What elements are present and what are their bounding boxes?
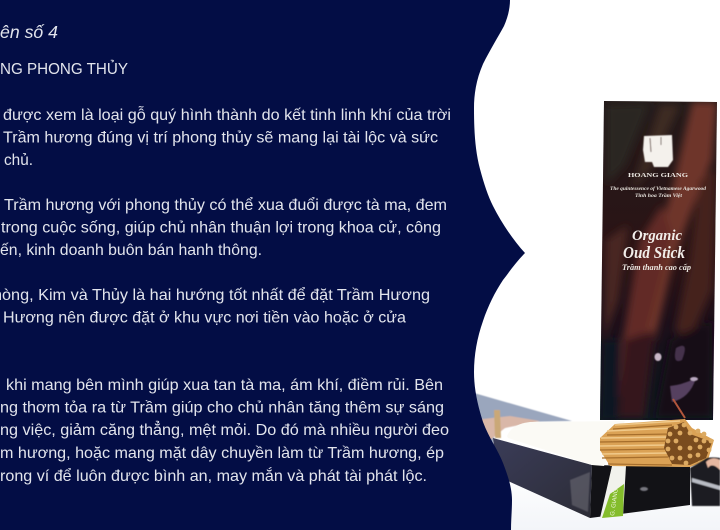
rear highlight [640, 487, 648, 491]
heading: ên số 4 [0, 22, 58, 42]
green label [600, 466, 626, 518]
box title second line: Oud Stick [623, 243, 686, 262]
box title: Organic [632, 228, 682, 244]
box tagline: The quintessence of Vietnamese Agarwood [610, 187, 707, 192]
paragraph 3 [0, 286, 430, 326]
box front [600, 101, 717, 420]
paragraph 1: chủ. [4, 152, 33, 169]
box tagline second line: Tinh hoa Trầm Việt [635, 194, 683, 199]
product photo [474, 101, 720, 530]
paragraph 1 [3, 105, 451, 169]
paragraph 2: Trầm hương với phong thủy có thể xua đuổi được tà ma, đem [4, 196, 447, 214]
navy wavy panel [0, 0, 525, 530]
package front face [590, 465, 690, 518]
text block [0, 22, 451, 485]
small incense package [493, 421, 690, 518]
paragraph 4: ng thơm tỏa ra từ Trầm giúp cho chủ nhân tăng thêm sự sáng [0, 400, 444, 416]
smoke [654, 346, 698, 402]
dark object on the right [690, 457, 720, 506]
paragraph 2: trong cuộc sống, giúp chủ nhân thuận lợi trong khoa cử, công [1, 220, 441, 236]
paragraph 2: ến, kinh doanh buôn bán hanh thông. [0, 242, 262, 259]
paragraph 4 [0, 377, 449, 485]
paragraph 4: m hương, hoặc mang mặt dây chuyền làm từ Trầm hương, ép [0, 445, 444, 462]
paragraph 3: hòng, Kim và Thủy là hai hướng tốt nhất để đặt Trầm Hương [0, 286, 430, 304]
paragraph 1: được xem là loại gỗ quý hình thành do kết tinh linh khí của trời [3, 105, 451, 124]
logo hand icon [643, 135, 673, 167]
back booklet [474, 393, 572, 470]
paper wrap [507, 421, 625, 466]
incense stick bundle [600, 419, 714, 467]
paragraph 3: Hương nên được đặt ở khu vực nơi tiền vào hoặc ở cửa [3, 310, 406, 326]
box subtitle: Trầm thanh cao cấp [622, 263, 691, 272]
paragraph 4: rong ví để luôn được bình an, may mắn và phát tài phát lộc. [0, 466, 427, 485]
box brand name: HOANG GIANG [628, 172, 688, 179]
paragraph 4: ng việc, giảm căng thẳng, mệt mỏi. Do đó mà nhiều người đeo [0, 420, 449, 439]
burning stick [673, 399, 685, 418]
label text: G. GIANG [610, 488, 620, 516]
tall incense box [600, 101, 717, 420]
paragraph 4: khi mang bên mình giúp xua tan tà ma, ám khí, điềm rủi. Bên [6, 377, 443, 394]
subheading: NG PHONG THỦY [0, 60, 128, 78]
stick ends [664, 422, 712, 465]
wood grain streaks [600, 102, 717, 420]
paragraph 1: Trầm hương đúng vị trí phong thủy sẽ mang lại tài lộc và sức [3, 130, 438, 146]
floor [480, 470, 720, 530]
package side face [493, 438, 592, 518]
paragraph 2 [0, 196, 447, 259]
